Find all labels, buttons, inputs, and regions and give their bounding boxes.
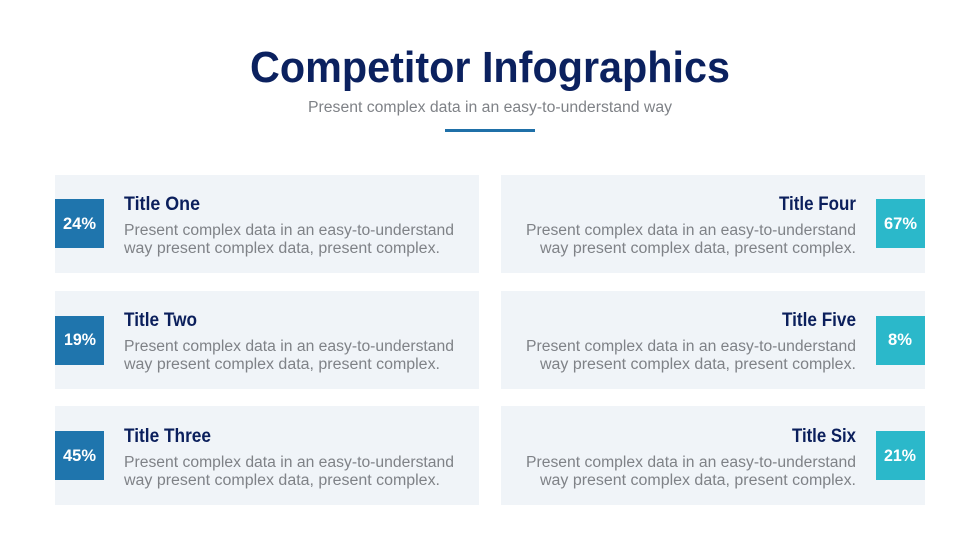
text block: title six: way present complex data, present complex. bbox=[539, 472, 856, 489]
badge: 24% bbox=[55, 199, 104, 248]
badge: 67%: 67% bbox=[884, 214, 917, 233]
subtitle: Present complex data in an easy-to-understand way bbox=[308, 99, 672, 116]
heading: title six: Title Six bbox=[792, 426, 856, 447]
text block: title five bbox=[526, 338, 856, 373]
heading: title three: Title Three bbox=[124, 426, 211, 447]
panel: title four bbox=[501, 175, 925, 273]
text block: title three bbox=[123, 454, 454, 489]
text block: title six bbox=[526, 454, 856, 489]
panel: title two bbox=[55, 291, 479, 389]
badge: 45%: 45% bbox=[63, 446, 96, 465]
panel: title six bbox=[501, 406, 925, 505]
heading: title four: Title Four bbox=[779, 194, 857, 215]
text block: title five: Present complex data in an easy-to-understand bbox=[526, 338, 856, 355]
text block: title four: Present complex data in an easy-to-understand bbox=[526, 222, 856, 239]
text block: title two: way present complex data, present complex. bbox=[123, 356, 440, 373]
heading: title five: Title Five bbox=[782, 310, 856, 331]
text block: title one: Present complex data in an easy-to-understand bbox=[124, 222, 454, 239]
text block: title three: Present complex data in an easy-to-understand bbox=[124, 454, 454, 471]
text block: title three: way present complex data, present complex. bbox=[123, 472, 440, 489]
panel: title one bbox=[55, 175, 479, 273]
panel: title three bbox=[55, 406, 479, 505]
text block: title six: Present complex data in an easy-to-understand bbox=[526, 454, 856, 471]
heading: title one: Title One bbox=[124, 194, 200, 215]
text block: title five: way present complex data, present complex. bbox=[539, 356, 856, 373]
badge: 45% bbox=[55, 431, 104, 480]
title underline bbox=[445, 129, 535, 132]
badge: 24%: 24% bbox=[63, 214, 96, 233]
badge: 8%: 8% bbox=[888, 330, 912, 349]
heading: title two: Title Two bbox=[124, 310, 197, 331]
text block: title one bbox=[123, 222, 454, 257]
badge: 67% bbox=[876, 199, 925, 248]
text block: title four bbox=[526, 222, 856, 257]
badge: 19% bbox=[55, 316, 104, 365]
badge: 19%: 19% bbox=[64, 330, 96, 349]
badge: 21%: 21% bbox=[884, 446, 916, 465]
text block: title four: way present complex data, present complex. bbox=[539, 240, 856, 257]
badge: 21% bbox=[876, 431, 925, 480]
badge: 8% bbox=[876, 316, 925, 365]
panel: title five bbox=[501, 291, 925, 389]
text block: title two bbox=[123, 338, 454, 373]
text block: title two: Present complex data in an easy-to-understand bbox=[124, 338, 454, 355]
title: Competitor Infographics bbox=[250, 43, 730, 92]
text block: title one: way present complex data, present complex. bbox=[123, 240, 440, 257]
